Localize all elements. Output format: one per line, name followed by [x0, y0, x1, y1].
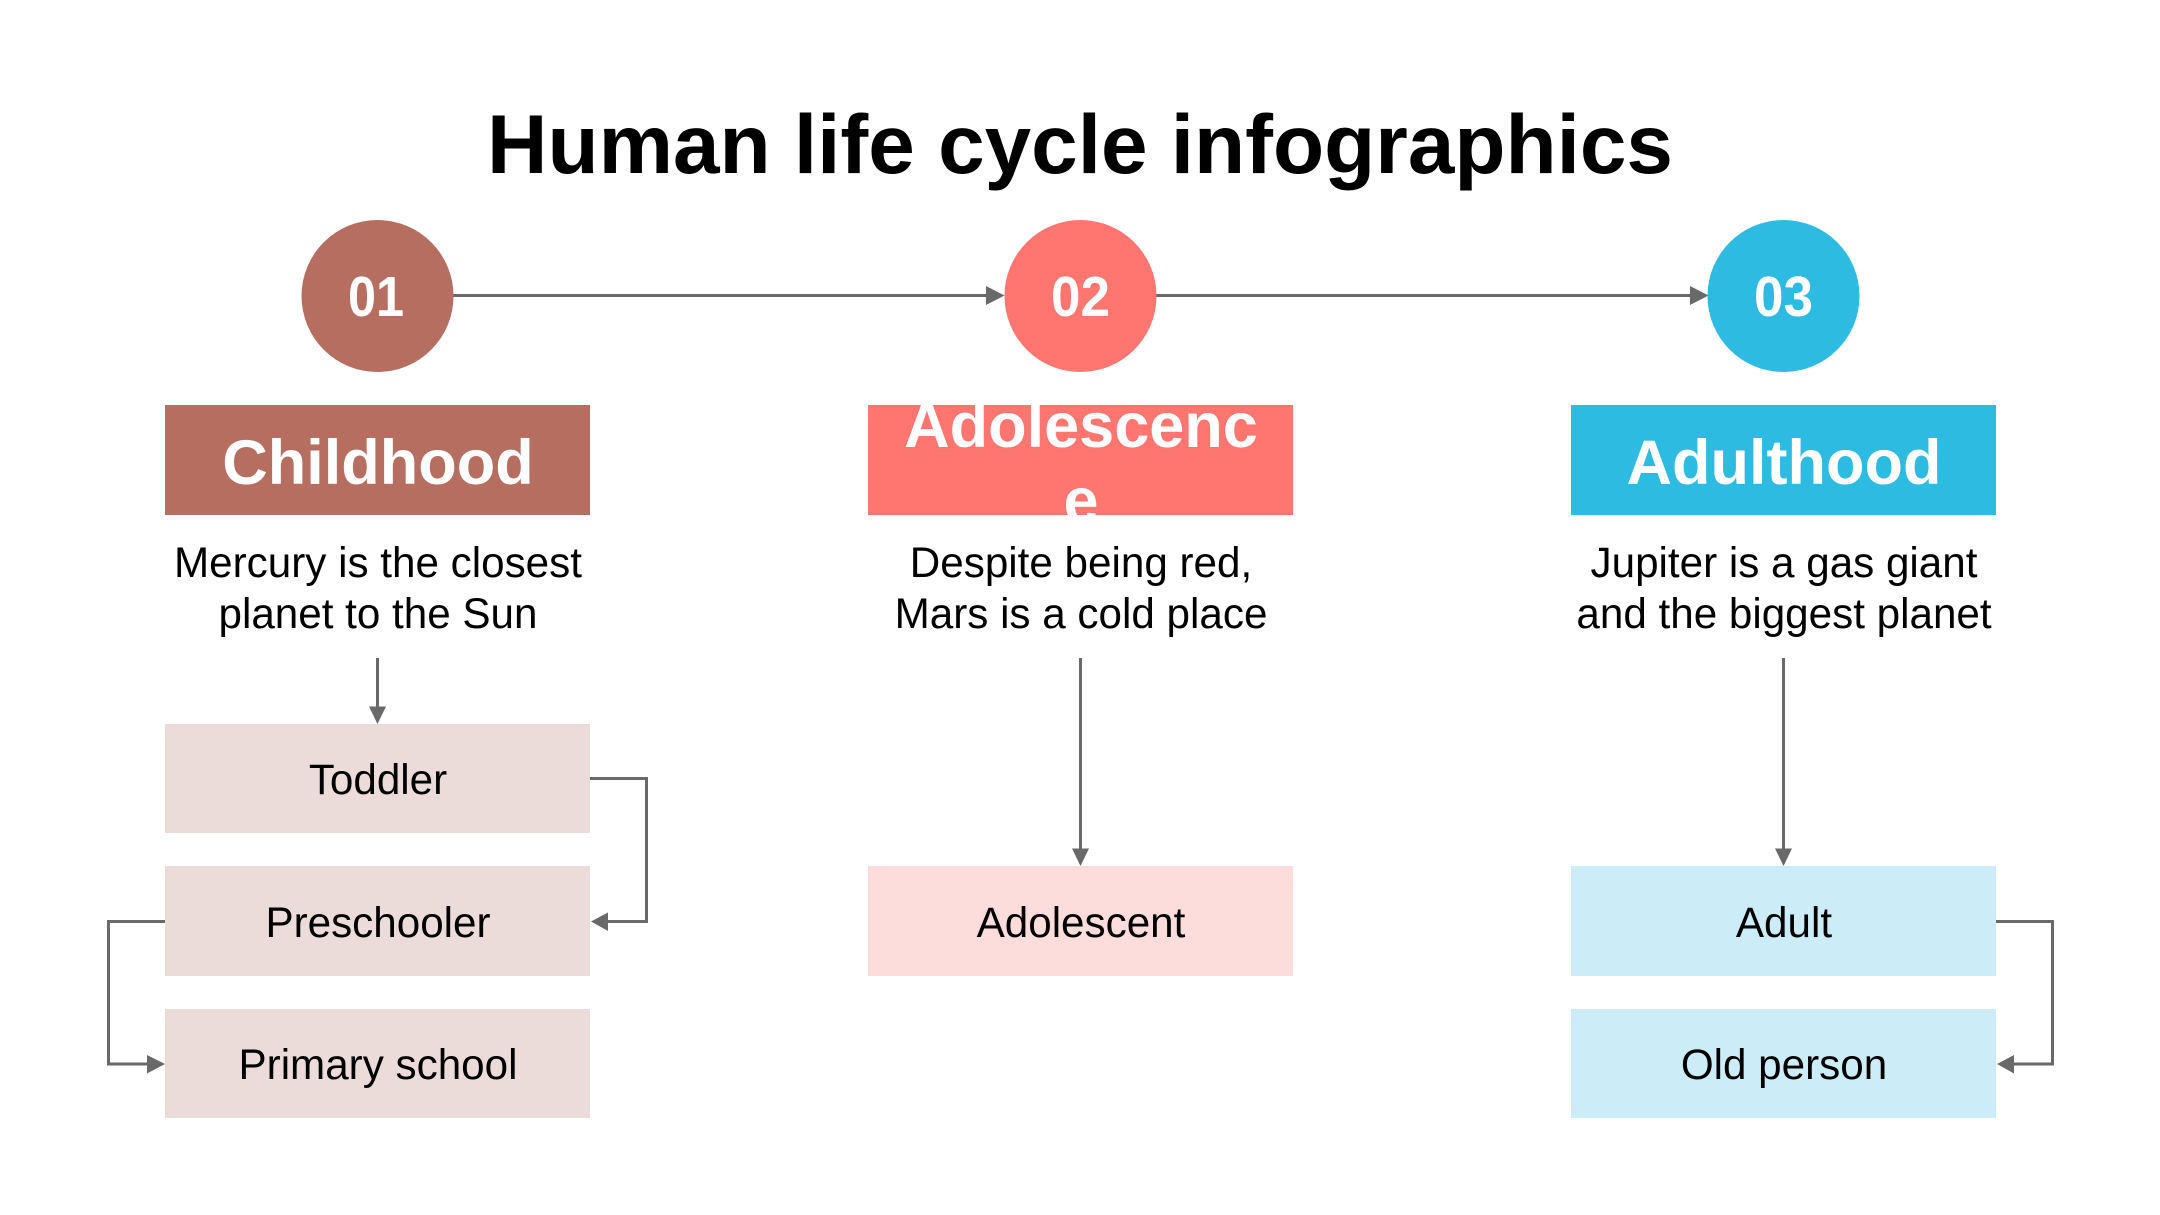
- box: Old person: Old person: [1681, 1041, 1887, 1088]
- box: Adult: Adult: [1736, 899, 1832, 946]
- arrow: Toddler to Preschooler: [590, 778, 646, 931]
- heading: Adulthood: Adulthood: [1627, 428, 1941, 498]
- arrow: 02 to 03: [1156, 286, 1708, 305]
- box: Primary school: Primary school: [239, 1041, 517, 1088]
- box: Adolescent: Adolescent: [977, 899, 1186, 946]
- heading: Adulthood: [1571, 405, 1996, 515]
- heading: Adolescence: [868, 391, 1293, 536]
- arrow: 01 to 02: [453, 286, 1004, 305]
- description: Mercury: planet to the Sun: [218, 590, 538, 637]
- box: Primary school: [165, 1009, 590, 1118]
- arrow: description to Adult: [1775, 658, 1792, 866]
- number badge 02: 02: [1051, 265, 1110, 329]
- number badge 01: 01: [348, 265, 404, 329]
- arrow: description to Toddler: [369, 658, 386, 724]
- box: Adolescent: [868, 866, 1293, 976]
- box: Adult: [1571, 866, 1996, 976]
- description: Jupiter: Jupiter is a gas giant: [1591, 539, 1977, 586]
- description: Mars: Despite being red,: [910, 539, 1252, 586]
- number badge 03: 03: [1754, 265, 1813, 329]
- arrow: Preschooler to Primary school: [108, 922, 165, 1074]
- panel: adulthood: [1571, 220, 2052, 1118]
- box: Toddler: [165, 724, 590, 833]
- arrow: Adult to Old person: [1996, 922, 2052, 1074]
- description: Mercury: Mercury is the closest: [174, 539, 582, 586]
- heading: Childhood: [165, 405, 590, 515]
- box: Preschooler: [165, 866, 590, 976]
- number badge 01: [302, 220, 454, 372]
- heading: Adolescence: Adolescenc: [904, 391, 1258, 461]
- title: Human life cycle infographics: [487, 97, 1673, 191]
- box: Old person: [1571, 1009, 1996, 1118]
- box: Preschooler: Preschooler: [265, 899, 491, 946]
- description: Mars: Mars is a cold place: [895, 590, 1267, 637]
- arrow: description to Adolescent: [1072, 658, 1089, 866]
- description: Jupiter: and the biggest planet: [1576, 590, 1992, 637]
- number badge 02: [1004, 220, 1156, 372]
- panel: childhood: [108, 220, 646, 1118]
- heading: Adolescence: e: [1063, 466, 1099, 536]
- panel: adolescence: [868, 220, 1293, 976]
- heading: Childhood: Childhood: [222, 428, 534, 498]
- number badge 03: [1708, 220, 1860, 372]
- box: Toddler: Toddler: [309, 756, 447, 803]
